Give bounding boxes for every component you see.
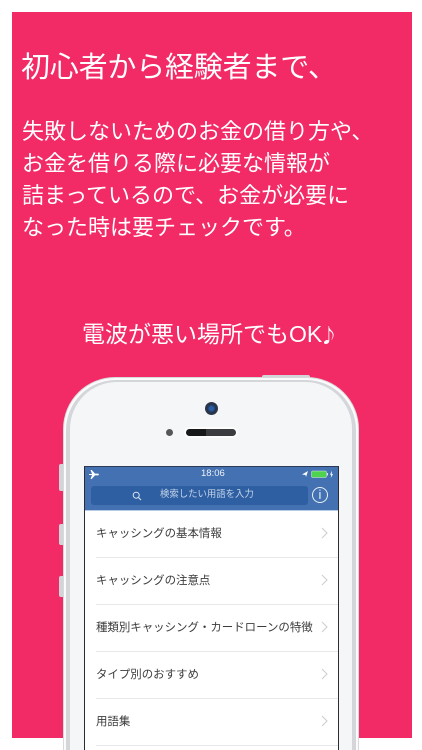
info icon <box>312 487 328 503</box>
row: recommendations <box>96 668 338 699</box>
search bar <box>91 486 308 505</box>
row: features <box>96 621 338 652</box>
screen <box>84 466 339 750</box>
top button <box>262 375 310 380</box>
status: airplane icon <box>89 470 99 479</box>
body text: 詰まっているので、お金が必要に <box>22 183 349 208</box>
search placeholder: 検索したい用語を入力 <box>160 488 254 499</box>
speaker <box>186 429 236 436</box>
body text: なった時は要チェックです。 <box>22 215 306 240</box>
camera <box>205 402 218 415</box>
phone body <box>63 377 359 750</box>
body text <box>22 119 373 240</box>
row: recommendations: タイプ別のおすすめ <box>96 669 199 681</box>
row: features: 種類別キャッシング・カードローンの特徴 <box>96 622 313 634</box>
row: glossary: 用語集 <box>96 716 130 728</box>
menu list <box>96 527 338 746</box>
row: glossary <box>96 715 338 746</box>
subheading: 電波が悪い場所でもOK♪ <box>82 321 338 348</box>
status: location and battery <box>302 470 333 478</box>
row: cautions <box>96 574 338 605</box>
info icon: i <box>319 487 321 502</box>
row: basics: キャッシングの基本情報 <box>96 528 222 540</box>
title: 初心者から経験者まで、 <box>21 52 337 84</box>
search icon <box>132 492 142 500</box>
status: time: 18:06 <box>201 468 225 479</box>
body text: 失敗しないためのお金の借り方や、 <box>22 119 373 144</box>
side volume buttons <box>59 464 63 597</box>
app header <box>85 467 338 511</box>
phone mockup <box>59 375 359 750</box>
body text: お金を借りる際に必要な情報が <box>22 151 330 176</box>
row: cautions: キャッシングの注意点 <box>96 575 210 587</box>
row: basics <box>96 527 338 558</box>
sensor dot <box>166 429 173 436</box>
